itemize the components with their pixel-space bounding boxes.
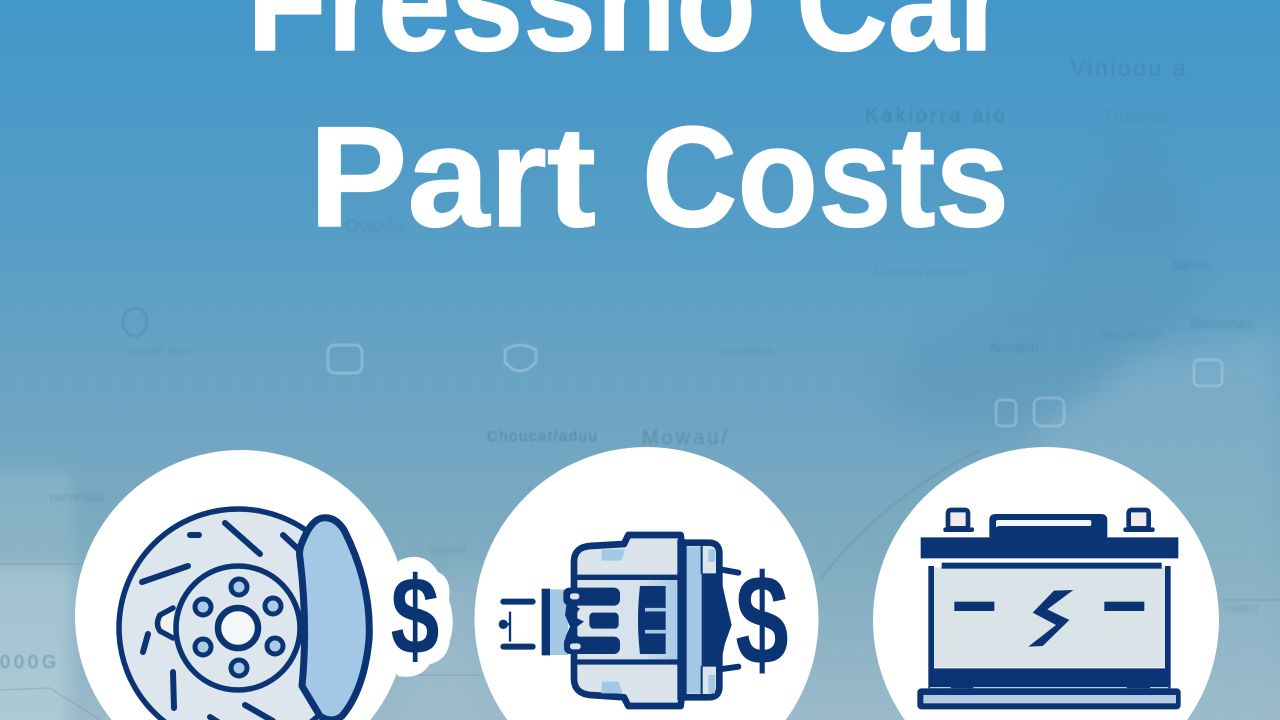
background: blue gradient with faint map: ocwsh uterr [130, 343, 192, 357]
background: blue gradient with faint map: uuinon [430, 543, 466, 557]
background: blue gradient with faint map: Vinioou a [1070, 55, 1188, 81]
background: blue gradient with faint map: parvtrotao [50, 490, 104, 504]
white circle badge [873, 447, 1219, 720]
background: blue gradient with faint map: Lontonn ouman [875, 264, 965, 279]
background: blue gradient with faint map: 000G [0, 652, 60, 672]
background: blue gradient with faint map: Choucat/aduu [487, 428, 598, 445]
title line 2 [309, 98, 1009, 257]
icon: alternator [499, 535, 738, 706]
title: Fressno Car Part Costs [247, 0, 1009, 257]
background: blue gradient with faint map: Mowau/ [642, 427, 730, 449]
background: blue gradient with faint map: Ovwviu [345, 216, 404, 236]
title line 2: Part [309, 98, 596, 257]
panel: brake disc icon with dollar sign [75, 450, 453, 720]
icon: car battery [917, 510, 1181, 709]
background: blue gradient with faint map: oosttor [1225, 603, 1259, 615]
white circle badge [474, 447, 818, 720]
icon: brake pad [300, 518, 369, 720]
background: blue gradient with faint map: Arontlon [990, 340, 1038, 355]
title line 2: Costs [642, 98, 1009, 257]
panel: car battery icon [873, 447, 1219, 720]
background: blue gradient with faint map: Simoto [1172, 258, 1212, 273]
panel: alternator icon with dollar sign [474, 447, 818, 720]
icon: dollar sign: $ [391, 556, 439, 678]
white circle badge and dollar sticker [75, 450, 453, 720]
background: blue gradient with faint map: Kakiorra aio [865, 105, 1008, 127]
icon: dollar sign: $ [735, 549, 789, 691]
background: blue gradient with faint map: Thawatt [1102, 107, 1169, 126]
background: blue gradient with faint map: Sitolounam [1190, 316, 1255, 331]
background: blue gradient with faint map: sousttoor [720, 343, 774, 358]
background: blue gradient with faint map: touu sesign [1100, 327, 1161, 341]
icon: brake rotor [119, 509, 357, 720]
